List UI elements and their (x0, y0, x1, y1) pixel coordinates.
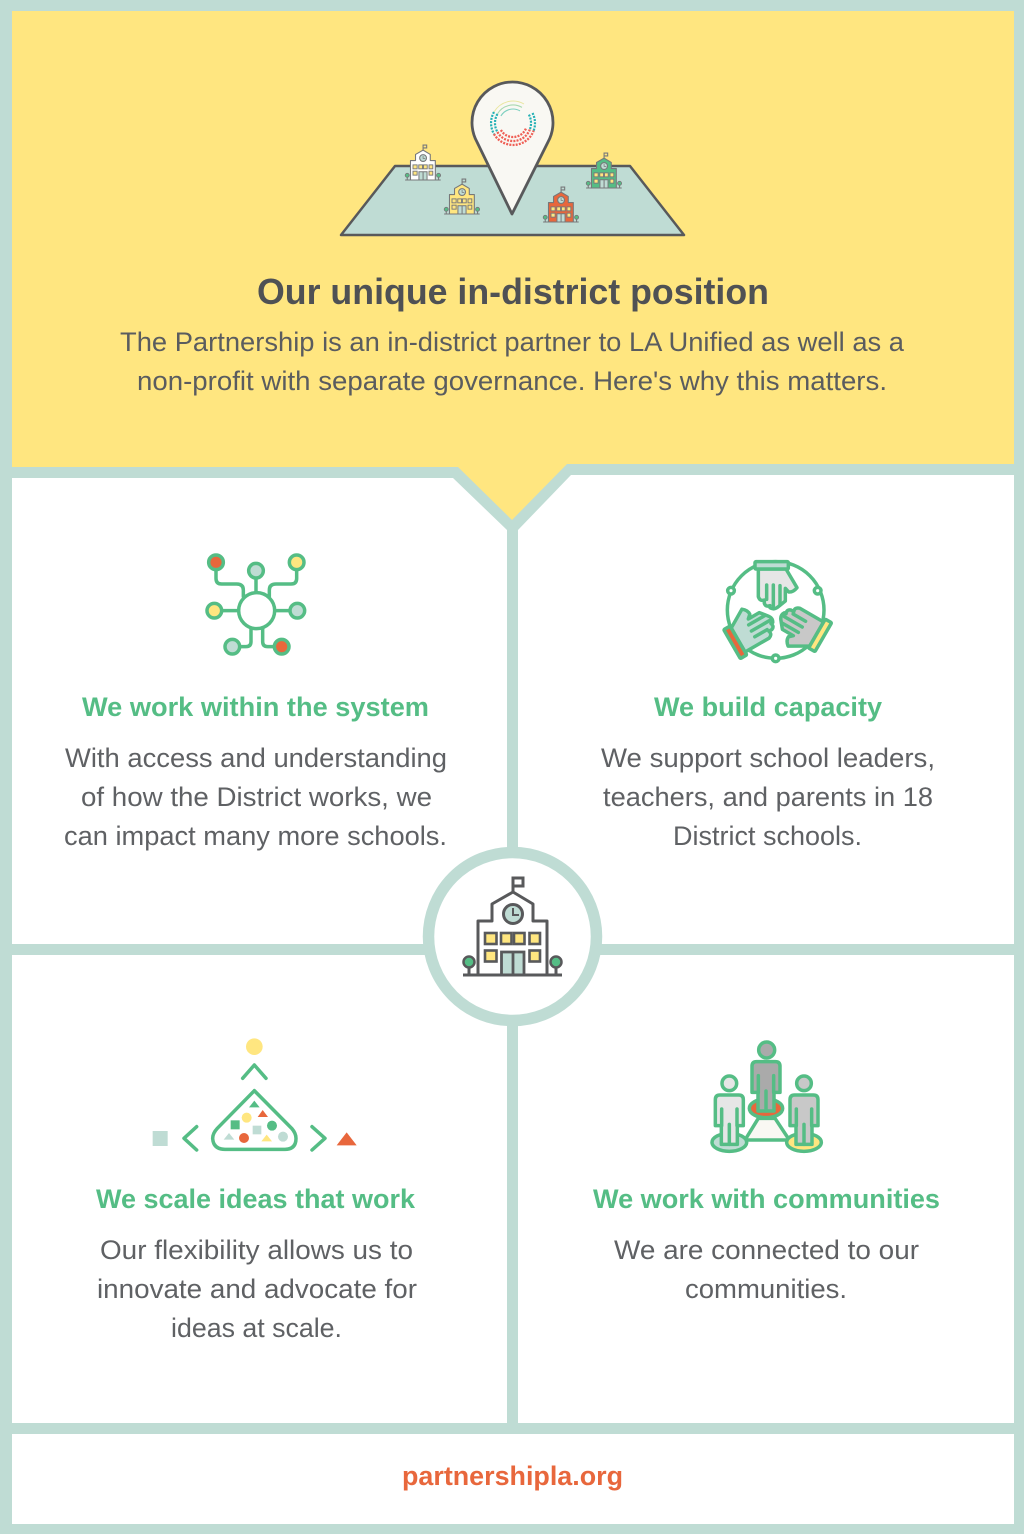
top hand (755, 562, 797, 609)
body text (601, 743, 935, 851)
title: Our unique in-district position (257, 271, 769, 312)
heading: We scale ideas that work (96, 1184, 416, 1214)
icon: funnel of ideas (153, 1038, 357, 1150)
body text: We are connected to our (614, 1235, 919, 1265)
panel: we work with communities (518, 955, 1014, 1423)
person: back (752, 1042, 780, 1111)
body text: We support school leaders, (601, 743, 935, 773)
icon: three hands (719, 562, 832, 662)
body text: of how the District works, we (81, 782, 432, 812)
icon: red school (543, 187, 579, 222)
body text: District schools. (673, 821, 862, 851)
icon: green school (586, 153, 622, 188)
map plane (341, 166, 684, 235)
body text (64, 743, 447, 851)
body text: ideas at scale. (171, 1313, 342, 1343)
panel: we work within the system (12, 478, 507, 944)
icon: white school (405, 145, 441, 180)
panel: we build capacity (518, 475, 1014, 944)
icon: network (207, 555, 305, 654)
intro text: The Partnership is an in-district partner to LA Unified as well as a (120, 327, 905, 357)
intro text (120, 327, 905, 396)
body text (97, 1235, 417, 1343)
body text: Our flexibility allows us to (100, 1235, 413, 1265)
panel: header (12, 11, 1014, 520)
right hand (770, 599, 832, 659)
icon: school (463, 878, 562, 975)
left hand (719, 599, 781, 659)
map illustration (341, 82, 684, 235)
body text: teachers, and parents in 18 (603, 782, 933, 812)
body text: innovate and advocate for (97, 1274, 417, 1304)
body text (614, 1235, 919, 1304)
body text: can impact many more schools. (64, 821, 447, 851)
central school badge (428, 852, 596, 1020)
heading: We work with communities (593, 1184, 940, 1214)
icon: yellow school (444, 179, 480, 214)
panel: we scale ideas that work (12, 955, 507, 1423)
website link: partnershipla.org (402, 1461, 623, 1491)
icon: location pin with logo (472, 82, 553, 214)
heading: We work within the system (82, 692, 429, 722)
body text: communities. (685, 1274, 847, 1304)
body text: With access and understanding (65, 743, 447, 773)
heading: We build capacity (654, 692, 882, 722)
panel: footer (12, 1434, 1014, 1524)
intro text: non-profit with separate governance. Here's why this matters. (137, 366, 887, 396)
person: right (790, 1076, 818, 1144)
icon: community people (712, 1042, 821, 1151)
person: left (715, 1076, 743, 1144)
